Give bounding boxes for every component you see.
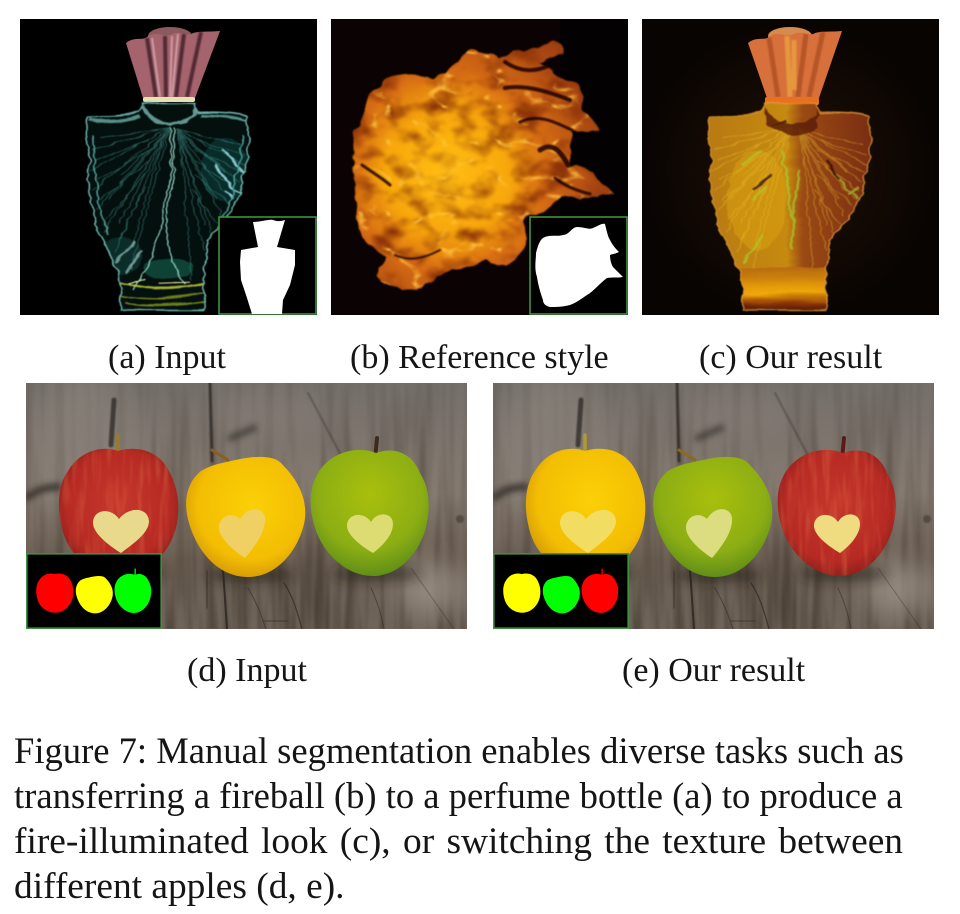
wood table background (26, 373, 467, 629)
panel: (e) our result apples (493, 373, 934, 629)
red apple (58, 433, 178, 554)
fireball (352, 43, 613, 290)
inset mask: apples (27, 554, 161, 628)
panel: (c) our result fire-lit bottle (642, 19, 939, 315)
wood table background (493, 373, 934, 629)
caption: (d) Input: (d) Input (187, 652, 307, 689)
panel: (a) input perfume bottle (20, 19, 317, 315)
panel: (d) input apples (26, 373, 467, 629)
dark gaps between flame tongues (362, 62, 590, 259)
inset mask: fireball (530, 217, 627, 314)
result cap dome (768, 27, 812, 45)
green apple (653, 450, 772, 577)
caption: (e) Our result: (e) Our result (622, 652, 806, 689)
red apple (773, 438, 898, 578)
flame core glow (375, 95, 515, 255)
yellow apple (526, 435, 645, 575)
figure caption text: fire-illuminated look (c), or switching the texture between (14, 821, 903, 862)
caption: (b) Reference style: (b) Reference style (350, 339, 609, 376)
bottle collar (143, 97, 195, 102)
figure caption text: Figure 7: Manual segmentation enables diverse tasks such as (14, 730, 904, 771)
figure caption text: different apples (d, e). (14, 866, 344, 907)
caption: (a) Input: (a) Input (108, 339, 227, 376)
caption: (c) Our result: (c) Our result (699, 339, 883, 376)
cap dome (148, 27, 192, 45)
result body (709, 103, 871, 313)
figure caption text: transferring a fireball (b) to a perfume bottle (a) to produce a (14, 775, 903, 816)
figure caption text (14, 730, 904, 907)
bottle body (87, 103, 249, 310)
result collar (765, 97, 819, 105)
bottle cap (126, 31, 220, 98)
inset mask: apples (494, 554, 628, 628)
panel: (b) reference style fireball (331, 19, 628, 315)
green apple (311, 438, 429, 576)
result cap (748, 31, 842, 98)
yellow apple (186, 450, 305, 577)
inset mask: bottle (219, 217, 316, 314)
